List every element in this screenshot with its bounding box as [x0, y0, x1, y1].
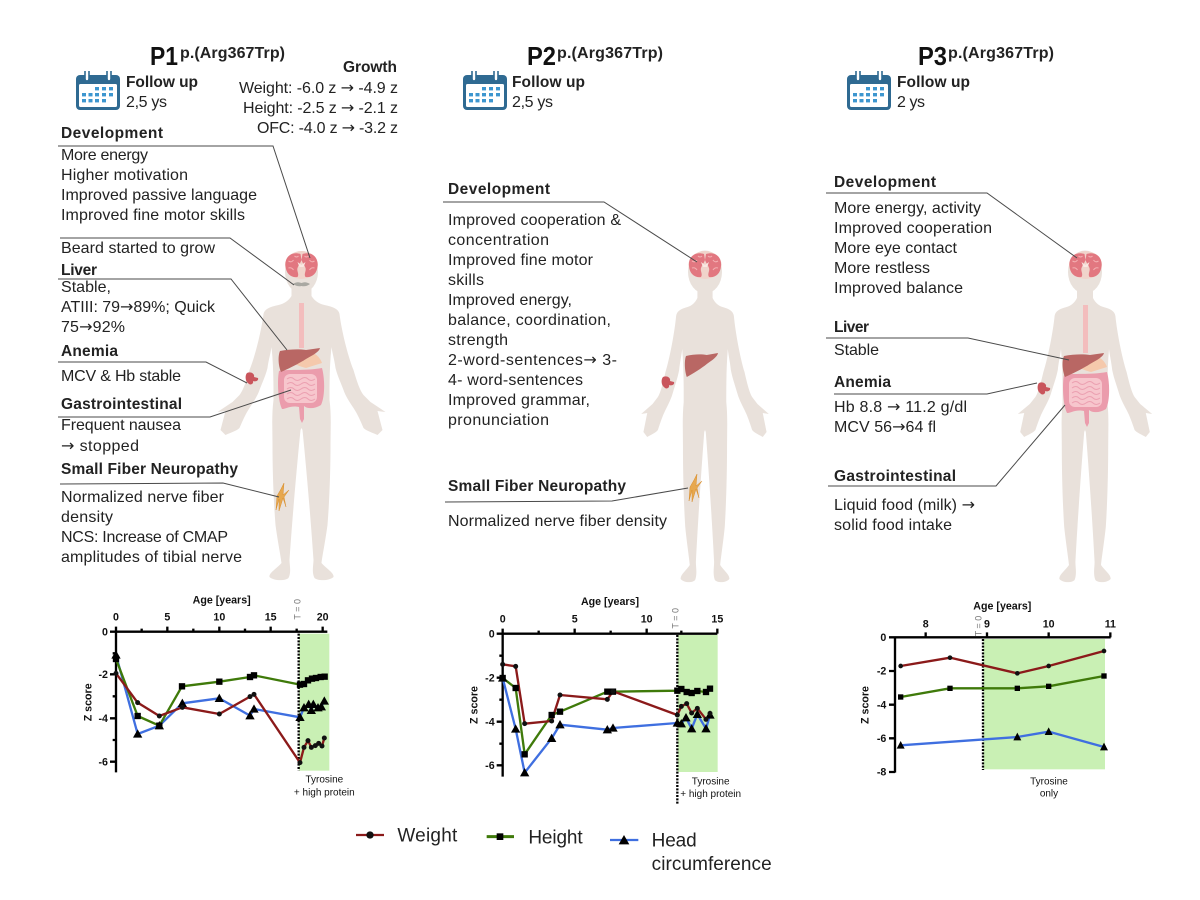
text block: gastrointestinal: Liquid food (milk) →	[834, 495, 975, 514]
chart: P2 growth z scores: + high protein	[680, 789, 741, 800]
text block: neuropathy	[61, 489, 242, 566]
chart: P2 growth z scores: -6	[485, 760, 495, 772]
panel: patient P3	[826, 41, 1152, 582]
text block: liver: Stable	[834, 342, 879, 359]
heading: Anemia: Anemia	[834, 374, 891, 391]
legend item: weight	[356, 826, 458, 847]
panel: patient P2	[443, 41, 769, 582]
icon: calendar	[847, 71, 891, 110]
leader line: liver	[826, 338, 1069, 360]
growth text block: OFC: -4.0 z → -3.2 z	[257, 118, 398, 137]
chart: P1 growth z scores: -2	[99, 669, 108, 681]
chart: P3 growth z scores: only	[1040, 788, 1058, 799]
text block: development: More energy	[61, 147, 148, 164]
legend item: weight: Weight	[397, 826, 458, 847]
text block: liver: 75→92%	[61, 317, 125, 336]
text block: gastrointestinal	[61, 417, 181, 455]
text block: liver: ATIII: 79→89%; Quick	[61, 297, 216, 316]
text block: neuropathy: NCS: Increase of CMAP	[61, 529, 228, 546]
follow up text: Follow up	[126, 74, 198, 91]
growth text block	[239, 59, 398, 137]
text block: anemia: Hb 8.8 → 11.2 g/dl	[834, 397, 967, 416]
chart: P1 growth z scores: 0	[113, 612, 119, 624]
chart: P1 growth z scores: Tyrosine	[305, 774, 344, 785]
text block: gastrointestinal	[834, 495, 975, 534]
leader line: anemia	[834, 383, 1037, 394]
text block: liver: Stable,	[61, 279, 111, 296]
chart: P1 growth z scores: -6	[99, 757, 108, 769]
heading: Development: Development	[61, 125, 163, 142]
chart: P1 growth z scores: + high protein	[294, 787, 355, 798]
growth text block: Weight: -6.0 z → -4.9 z	[239, 78, 398, 97]
title: P1: p.(Arg367Trp)	[180, 45, 285, 62]
chart: P1 growth z scores: 10	[213, 612, 225, 624]
chart: P1 growth z scores: T = 0	[293, 599, 303, 620]
follow up text: Follow up	[512, 74, 585, 91]
chart: P3 growth z scores: Tyrosine	[1030, 776, 1068, 787]
follow up text: 2,5 ys	[512, 94, 553, 111]
chart: P3 growth z scores: -2	[877, 666, 886, 678]
leader line: anemia	[58, 362, 247, 383]
title: P2	[527, 41, 663, 71]
icon: calendar	[76, 71, 120, 110]
text block: development	[834, 200, 992, 297]
follow up text: 2,5 ys	[126, 94, 167, 111]
chart: P3 growth z scores: 11	[1105, 618, 1116, 630]
heading: Gastrointestinal: Gastrointestinal	[834, 468, 956, 485]
chart: P1 growth z scores: 0	[102, 626, 108, 638]
chart: P1 growth z scores: 20	[317, 612, 329, 624]
text block: development: More eye contact	[834, 240, 958, 257]
text block: neuropathy: Normalized nerve fiber density	[448, 513, 667, 530]
text block: development: concentration	[448, 232, 549, 249]
text block: development: Improved cooperation	[834, 220, 992, 237]
heading: Small Fiber Neuropathy: Small Fiber Neuropathy	[448, 478, 626, 495]
leader line: brain	[58, 146, 310, 258]
title: P3: P3	[918, 41, 947, 71]
text block: development: Improved fine motor	[448, 252, 594, 269]
chart: P2 growth z scores: 0	[500, 614, 506, 626]
text block: neuropathy: amplitudes of tibial nerve	[61, 549, 242, 566]
follow up text: 2 ys	[897, 94, 925, 111]
title: P3: p.(Arg367Trp)	[948, 45, 1054, 62]
text block: development	[448, 212, 621, 429]
text block: gastrointestinal: Frequent nausea	[61, 417, 181, 434]
text block: anemia: MCV & Hb stable	[61, 368, 181, 385]
chart: P2 growth z scores: T = 0	[671, 608, 681, 629]
chart: P3 growth z scores: 0	[880, 632, 886, 644]
text block: gastrointestinal: → stopped	[61, 436, 139, 455]
heading: Small Fiber Neuropathy: Small Fiber Neuropathy	[61, 461, 238, 478]
follow up text	[512, 74, 585, 111]
text block: development: More restless	[834, 260, 930, 277]
text block: development: Improved balance	[834, 280, 963, 297]
text block: beard: Beard started to grow	[61, 240, 215, 257]
text block: development: pronunciation	[448, 412, 549, 429]
chart: P2 growth z scores: Tyrosine	[692, 776, 730, 787]
chart: P3 growth z scores: -6	[877, 733, 886, 745]
title: P2: P2	[527, 41, 556, 71]
title: P1	[150, 41, 285, 71]
chart: P2 growth z scores: 5	[572, 614, 578, 626]
text block: development: strength	[448, 332, 508, 349]
legend	[356, 826, 772, 875]
text block: neuropathy: Normalized nerve fiber	[61, 489, 225, 506]
icon: moustache	[293, 282, 310, 286]
heading: Liver: Liver	[834, 319, 869, 336]
text block: development	[61, 147, 257, 224]
text block: development: Improved passive language	[61, 187, 257, 204]
leader line: brain	[826, 193, 1077, 258]
heading: Development: Development	[448, 181, 550, 198]
text block: development: Improved grammar,	[448, 392, 590, 409]
leader line: liver	[58, 279, 287, 350]
text block: neuropathy: density	[61, 509, 113, 526]
chart: P3 growth z scores: T = 0	[974, 616, 984, 636]
chart: P2 growth z scores	[468, 596, 741, 804]
text block: development: skills	[448, 272, 484, 289]
title: P2: p.(Arg367Trp)	[557, 45, 663, 62]
text block: development: 4- word-sentences	[448, 372, 583, 389]
title: P1: P1	[150, 41, 178, 71]
chart: P2 growth z scores: -4	[485, 716, 495, 728]
leader line: brain	[443, 202, 697, 262]
chart: P1 growth z scores: Z score	[83, 683, 95, 721]
text block: gastrointestinal: solid food intake	[834, 517, 952, 534]
heading: Gastrointestinal: Gastrointestinal	[61, 396, 182, 413]
legend item: head circumference: circumference	[652, 854, 772, 875]
chart: P3 growth z scores: -8	[877, 767, 886, 779]
text block: development: Higher motivation	[61, 167, 188, 184]
leader line: nerve	[445, 488, 688, 502]
chart: P2 growth z scores: 10	[641, 614, 653, 626]
legend item: head circumference: Head	[652, 831, 697, 852]
follow up text: Follow up	[897, 74, 970, 91]
chart: P2 growth z scores: 15	[711, 614, 723, 626]
text block: anemia	[834, 397, 967, 436]
panel: patient P1	[58, 41, 398, 580]
legend item: head circumference	[610, 831, 772, 875]
chart: P2 growth z scores: Z score	[468, 686, 480, 724]
follow up text	[897, 74, 970, 111]
heading: Liver: Liver	[61, 262, 97, 279]
chart: P1 growth z scores	[83, 595, 355, 798]
text block: development: Improved fine motor skills	[61, 207, 245, 224]
text block: development: Improved cooperation &	[448, 212, 621, 229]
chart: P3 growth z scores: 10	[1043, 618, 1055, 630]
leader line: beard	[60, 238, 294, 285]
chart: P1 growth z scores: -4	[99, 713, 108, 725]
leader line: nerve	[60, 483, 279, 497]
text block: liver	[61, 279, 216, 336]
chart: P1 growth z scores: Age [years]	[193, 595, 251, 607]
leader line: gut	[828, 405, 1065, 486]
heading: Anemia: Anemia	[61, 343, 118, 360]
body figure with organs	[218, 251, 386, 580]
leader line: gut	[58, 390, 291, 417]
chart: P2 growth z scores: -2	[485, 672, 495, 684]
chart: P2 growth z scores: 0	[489, 628, 495, 640]
chart: P3 growth z scores: 8	[923, 618, 929, 630]
text block: development: 2-word-sentences→ 3-	[448, 350, 617, 369]
chart: P3 growth z scores	[860, 600, 1116, 799]
follow up text	[126, 74, 198, 111]
icon: calendar	[463, 71, 507, 110]
text block: development: balance, coordination,	[448, 312, 611, 329]
chart: P2 growth z scores: Age [years]	[581, 596, 639, 608]
legend item: height: Height	[528, 827, 583, 848]
growth text block: Growth	[343, 59, 397, 76]
text block: development: More energy, activity	[834, 200, 981, 217]
legend item: height	[487, 827, 583, 848]
text block: anemia: MCV 56→64 fl	[834, 417, 936, 436]
title: P3	[918, 41, 1054, 71]
chart: P3 growth z scores: Z score	[860, 686, 872, 724]
body figure with organs	[1018, 250, 1152, 582]
chart: P1 growth z scores: 15	[265, 612, 277, 624]
chart: P3 growth z scores: 9	[984, 618, 990, 630]
heading: Development: Development	[834, 174, 936, 191]
chart: P3 growth z scores: -4	[877, 699, 886, 711]
body figure with organs	[641, 250, 769, 582]
growth text block: Height: -2.5 z → -2.1 z	[243, 98, 398, 117]
chart: P3 growth z scores: Age [years]	[973, 600, 1031, 612]
chart: P1 growth z scores: 5	[164, 612, 170, 624]
text block: development: Improved energy,	[448, 292, 572, 309]
